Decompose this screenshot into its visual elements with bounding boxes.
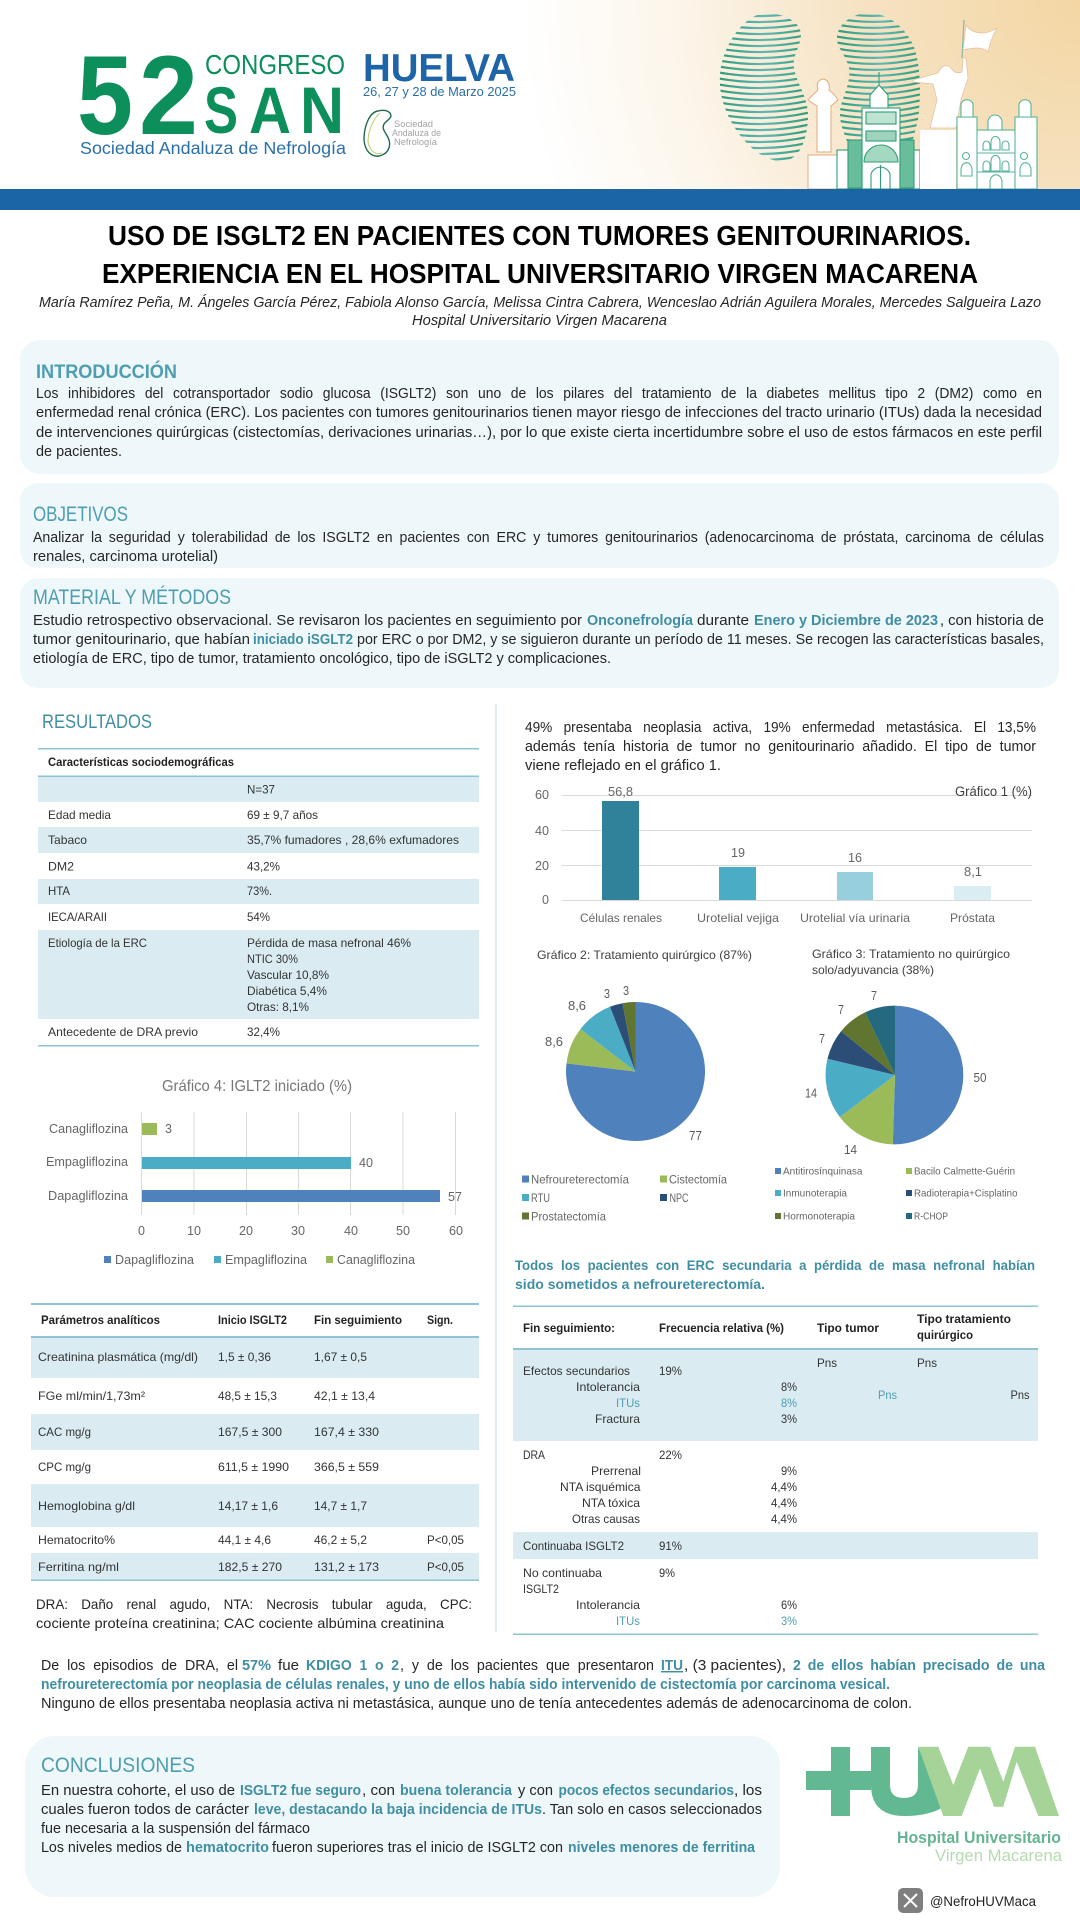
title [102,220,978,289]
chart: grafico 3 pie: 7 [819,1031,825,1046]
legend: Empagliflozina [225,1253,307,1267]
table: parametros analiticos: FGe ml/min/1,73m² [38,1389,145,1403]
table: caracteristicas sociodemograficas [38,748,479,1046]
panel: introduccion [20,340,1059,474]
table: caracteristicas sociodemograficas: DM2 [48,860,74,874]
text: metodos body: Estudio retrospectivo observacional. Se revisaron los pacientes en seguimiento por [33,613,582,629]
chart: grafico 4: 40 [344,1224,358,1238]
text: conclusiones body: hematocrito [186,1840,269,1856]
text: metodos body: , con historia de [940,613,1044,629]
table: caracteristicas sociodemograficas: NTIC 30% [247,952,298,966]
logo: hospital universitario: Hospital Universitario [897,1828,1061,1847]
text: DRA episodes paragraph: KDIGO 1 o 2 [306,1658,399,1674]
text: tumor description: viene reflejado en el gráfico 1. [525,758,721,774]
text: DRA episodes paragraph: De los episodios de DRA, el [41,1658,238,1674]
table: parametros analiticos: Inicio ISGLT2 [218,1313,287,1327]
table: parametros analiticos: Parámetros analíticos [41,1313,160,1327]
text: tumor description: además tenía historia de tumor no genitourinario añadido. El tipo de tumor [525,739,1036,755]
table: parametros analiticos: 48,5 ± 15,3 [218,1389,277,1403]
text: DRA episodes paragraph: ITU [661,1658,683,1674]
chart: grafico 1: 8,1 [964,865,982,879]
table: parametros analiticos: 44,1 ± 4,6 [218,1533,271,1547]
table: fin seguimiento: Pns [817,1356,837,1370]
text: metodos body: tumor genitourinario, que habían [33,632,250,648]
text: nefroureterectomia finding [515,1258,1035,1292]
congress logo [77,33,516,158]
table: fin seguimiento: DRA [523,1448,545,1462]
chart: grafico 2 pie: 3 [604,986,610,1001]
table: parametros analiticos: 182,5 ± 270 [218,1560,282,1574]
text: introduccion body [36,386,1042,460]
text: conclusiones body: En nuestra cohorte, el uso de [41,1783,235,1799]
chart: grafico 4: 10 [187,1224,201,1238]
icon: flag statue [913,20,997,189]
heading: resultados: RESULTADOS [42,712,152,733]
table: caracteristicas sociodemograficas: Edad media [48,808,111,822]
table: parametros analiticos: Ferritina ng/ml [38,1560,119,1574]
table: parametros analiticos: 366,5 ± 559 [314,1460,379,1474]
text: conclusiones body: niveles menores de ferritina [568,1840,756,1856]
table: fin seguimiento: 9% [659,1566,675,1580]
table: fin seguimiento: Frecuencia relativa (%) [659,1321,784,1335]
header banner [0,0,1080,210]
chart: grafico 4: 50 [396,1224,410,1238]
text: conclusiones body: y con [518,1783,553,1799]
chart: grafico 4: Dapagliflozina [48,1189,128,1203]
table: fin seguimiento: Pns [917,1356,937,1370]
text: DRA episodes paragraph: 2 de ellos habían precisado de una [793,1658,1046,1674]
text: tumor description [525,720,1036,774]
table: fin seguimiento: 4,4% [771,1480,797,1494]
table: fin seguimiento: 9% [781,1464,797,1478]
chart: grafico 1: 56,8 [608,785,633,799]
table: parametros analiticos: 167,5 ± 300 [218,1425,282,1439]
table: fin seguimiento: 8% [781,1396,797,1410]
table: parametros analiticos: 1,67 ± 0,5 [314,1350,367,1364]
chart: grafico 4: 0 [138,1224,145,1238]
table: fin seguimiento: NTA tóxica [582,1496,640,1510]
legend: RTU [531,1191,550,1205]
text: introduccion body: Los inhibidores del cotransportador sodio glucosa (ISGLT2) son uno de los pilares del tratamiento de la diabetes mellitus tipo 2 (DM2) como en [36,386,1042,402]
text: conclusiones body: pocos efectos secundarios [558,1783,734,1799]
text: conclusiones body [41,1783,762,1856]
table: fin seguimiento: Pns [878,1388,897,1402]
table: caracteristicas sociodemograficas: Etiología de la ERC [48,936,147,950]
text: introduccion body: enfermedad renal crónica (ERC). Los pacientes con tumores genitourinarios tienen mayor riesgo de infecciones del tracto urinario (ITUs) dada la necesidad [36,405,1042,421]
text: abbreviations footnote [36,1596,472,1631]
chart: grafico 1: 19 [731,846,745,860]
bars [602,801,991,900]
table: caracteristicas sociodemograficas: Características sociodemográficas [48,755,234,769]
heading: material y metodos: MATERIAL Y MÉTODOS [33,586,231,609]
table: caracteristicas sociodemograficas: Antecedente de DRA previo [48,1025,198,1039]
chart: grafico 1: 40 [535,824,549,838]
table: parametros analiticos: 611,5 ± 1990 [218,1460,289,1474]
text: metodos body: iniciado iSGLT2 [253,632,353,648]
table: fin seguimiento: Tipo tratamiento [917,1312,1011,1326]
heading: conclusiones: CONCLUSIONES [41,1754,195,1777]
table: fin seguimiento: 91% [659,1539,682,1553]
table: fin seguimiento: No continuaba [523,1566,602,1580]
table: caracteristicas sociodemograficas: 43,2% [247,860,280,874]
pie slices [566,1002,705,1141]
table: fin seguimiento: 6% [781,1598,797,1612]
table: parametros analiticos: P<0,05 [427,1560,464,1574]
table: fin seguimiento: quirúrgico [917,1328,973,1342]
congress logo: S [204,73,238,147]
congress logo: N [300,73,344,147]
chart: grafico 3 pie: 14 [805,1086,817,1100]
table: parametros analiticos: 14,7 ± 1,7 [314,1499,367,1513]
table: parametros analiticos: 131,2 ± 173 [314,1560,379,1574]
icon: cathedral [957,100,1037,189]
table: caracteristicas sociodemograficas: Tabaco [48,833,87,847]
panel: conclusiones [25,1736,780,1897]
table: fin seguimiento: Efectos secundarios [523,1364,630,1378]
legend: Canagliflozina [337,1253,415,1267]
icon: church [837,72,920,189]
chart: grafico 1: Urotelial vía urinaria [800,911,910,925]
table: caracteristicas sociodemograficas: Vascular 10,8% [247,968,329,982]
panel: material y metodos [20,578,1059,688]
table: caracteristicas sociodemograficas: 32,4% [247,1025,280,1039]
chart: grafico 2 pie [522,948,752,1224]
congress logo: A [249,73,291,147]
legend: Radioterapia+Cisplatino [914,1188,1018,1200]
chart: grafico 1 [535,784,1032,925]
text: conclusiones body: Los niveles medios de [41,1840,182,1856]
congress logo: HUELVA [363,47,515,90]
chart: grafico 1: 60 [535,788,549,802]
table: parametros analiticos: Hemoglobina g/dl [38,1499,135,1513]
table: fin seguimiento: 4,4% [771,1496,797,1510]
table: fin seguimiento: 19% [659,1364,682,1378]
legend [522,1172,727,1224]
table: fin seguimiento: 3% [781,1412,797,1426]
text: objetivos body: renales, carcinoma urotelial) [33,549,218,565]
text: DRA episodes paragraph [41,1658,1046,1712]
table: fin seguimiento: 22% [659,1448,682,1462]
table: parametros analiticos: CAC mg/g [38,1425,91,1439]
table: parametros analiticos [31,1303,479,1581]
pie slices [826,1006,963,1144]
table: parametros analiticos: 46,2 ± 5,2 [314,1533,367,1547]
table: parametros analiticos: Fin seguimiento [314,1313,402,1327]
table: fin seguimiento: Prerrenal [591,1464,641,1478]
legend: Cistectomía [669,1172,727,1186]
chart: grafico 4: 57 [448,1190,462,1204]
text: nefroureterectomia finding: sido sometidos a nefroureterectomía. [515,1277,765,1292]
congress logo: 5 [77,33,133,158]
text: DRA episodes paragraph: 57% [242,1658,271,1674]
authors [39,294,1041,329]
text: metodos body: Enero y Diciembre de 2023 [754,613,938,629]
text: metodos body [33,613,1044,667]
text: abbreviations footnote: cociente proteína creatinina; CAC cociente albúmina creatinina [36,1615,444,1631]
chart: grafico 4: 20 [239,1224,253,1238]
text: metodos body: durante [697,613,749,629]
text: DRA episodes paragraph: nefroureterectomía por neoplasia de células renales, y uno de ellos había sido intervenido de cistectomía por carcinoma vesical. [41,1677,890,1693]
text: DRA episodes paragraph: fue [278,1658,299,1674]
icon: small kidney [364,110,391,156]
congress logo: Sociedad [394,119,433,129]
table: caracteristicas sociodemograficas: N=37 [247,782,275,796]
table: fin seguimiento: ITUs [616,1396,640,1410]
chart: grafico 3 pie: 7 [871,988,877,1003]
legend [775,1166,1018,1222]
chart: grafico 3 pie: 50 [974,1070,986,1085]
table: parametros analiticos: P<0,05 [427,1533,464,1547]
table: fin seguimiento: Otras causas [572,1512,640,1526]
chart: grafico 1: Urotelial vejiga [697,911,779,925]
chart: grafico 3 pie: 14 [844,1142,857,1157]
table: fin seguimiento: 4,4% [771,1512,797,1526]
icon: kidney right [837,14,920,142]
table: fin seguimiento: Intolerancia [576,1598,640,1612]
table: parametros analiticos: 1,5 ± 0,36 [218,1350,271,1364]
chart: grafico 1: Próstata [950,911,995,925]
table: caracteristicas sociodemograficas: Otras: 8,1% [247,1000,309,1014]
table: caracteristicas sociodemograficas: 35,7% fumadores , 28,6% exfumadores [247,833,459,847]
text: objetivos body [33,530,1044,565]
chart: grafico 1: Células renales [580,911,662,925]
table: fin seguimiento: ISGLT2 [523,1582,559,1596]
table: fin seguimiento: 3% [781,1614,797,1628]
table: parametros analiticos: 167,4 ± 330 [314,1425,379,1439]
text: introduccion body: de pacientes. [36,444,122,460]
text: conclusiones body: fueron superiores tras el inicio de ISGLT2 con [272,1840,563,1856]
bars [142,1123,440,1202]
text: conclusiones body: fue necesaria a la suspensión del fármaco [41,1821,310,1837]
legend: Nefroureterectomía [531,1172,629,1186]
icon: X [898,1888,923,1913]
heading: objetivos: OBJETIVOS [33,503,128,526]
text: metodos body: etiología de ERC, tipo de tumor, tratamiento oncológico, tipo de iSGLT2 y complicaciones. [33,651,611,667]
heading: introduccion: INTRODUCCIÓN [36,361,177,383]
text: introduccion body: de intervenciones quirúrgicas (cistectomías, derivaciones urinarias…), por lo que existe cierta incertidumbre sobre el uso de estos fármacos en este perfil [36,425,1042,441]
congress logo: 26, 27 y 28 de Marzo 2025 [363,84,516,99]
text: DRA episodes paragraph: Ninguno de ellos presentaba neoplasia activa ni metastásica, aunque uno de tenía antecedentes además de adenocarcinoma de colon. [41,1696,912,1712]
table: fin seguimiento: 8% [781,1380,797,1394]
legend: Dapagliflozina [115,1253,194,1267]
chart: grafico 1: 20 [535,859,549,873]
chart title: Gráfico 1 (%) [955,784,1032,799]
chart: grafico 1: 0 [542,893,549,907]
chart: grafico 4: 3 [165,1122,172,1136]
table: caracteristicas sociodemograficas: 73%. [247,884,272,898]
table: fin seguimiento [513,1306,1038,1635]
congress logo: Nefrología [394,137,437,147]
table: caracteristicas sociodemograficas: HTA [48,884,70,898]
text: objetivos body: Analizar la seguridad y tolerabilidad de los ISGLT2 en pacientes con ERC y tumores genitourinarios (adenocarcinoma de próstata, carcinoma de células [33,530,1044,546]
authors: Hospital Universitario Virgen Macarena [412,313,667,329]
text: nefroureterectomia finding: Todos los pacientes con ERC secundaria a pérdida de masa nefronal habían [515,1258,1035,1273]
text: abbreviations footnote: DRA: Daño renal agudo, NTA: Necrosis tubular aguda, CPC: [36,1596,472,1612]
text: DRA episodes paragraph: , (3 pacientes), [684,1658,786,1674]
chart: grafico 2 pie: 8,6 [545,1034,563,1049]
title: USO DE ISGLT2 EN PACIENTES CON TUMORES GENITOURINARIOS. [108,220,971,251]
table: parametros analiticos: Sign. [427,1313,453,1327]
text: conclusiones body: leve, destacando la baja incidencia de ITUs [254,1802,542,1818]
table: fin seguimiento: Tipo tumor [817,1321,879,1335]
congress logo: 2 [139,33,198,158]
chart title: Gráfico 2: Tratamiento quirúrgico (87%) [537,948,752,962]
text: conclusiones body: . Tan solo en casos seleccionados [542,1802,762,1818]
authors: María Ramírez Peña, M. Ángeles García Pérez, Fabiola Alonso García, Melissa Cintra Cabrera, Wenceslao Adrián Aguilera Morales, Mercedes Salgueira Lazo [39,294,1041,311]
chart: grafico 4: 40 [359,1156,373,1170]
legend: Antitirosínquinasa [783,1166,863,1178]
legend: R-CHOP [914,1210,948,1222]
text: tumor description: 49% presentaba neoplasia activa, 19% enfermedad metastásica. El 13,5% [525,720,1036,736]
legend: NPC [670,1191,689,1205]
table: caracteristicas sociodemograficas: Pérdida de masa nefronal 46% [247,936,411,950]
chart: grafico 2 pie: 8,6 [568,998,586,1013]
text: conclusiones body: , con [362,1783,395,1799]
chart title: Gráfico 3: Tratamiento no quirúrgico [812,947,1010,961]
chart: grafico 4: 60 [449,1224,463,1238]
table: caracteristicas sociodemograficas: 69 ± 9,7 años [247,808,318,822]
table: parametros analiticos: Creatinina plasmática (mg/dl) [38,1350,198,1364]
table: fin seguimiento: Continuaba ISGLT2 [523,1539,624,1553]
chart: grafico 3 pie [775,947,1018,1222]
table: caracteristicas sociodemograficas: 54% [247,910,270,924]
social handle: @NefroHUVMaca [930,1894,1036,1909]
chart: grafico 4: Canagliflozina [49,1122,128,1136]
table: fin seguimiento: Pns [1010,1388,1030,1402]
icon: kidney left [720,14,808,160]
table: parametros analiticos: CPC mg/g [38,1460,91,1474]
text: conclusiones body: , los [734,1783,762,1799]
table: fin seguimiento: ITUs [616,1614,640,1628]
chart: grafico 3 pie: 7 [838,1002,844,1017]
logo: hospital universitario: Virgen Macarena [935,1846,1063,1865]
text: metodos body: por ERC o por DM2, y se siguieron durante un período de 11 meses. Se recogen las características basales, [357,632,1044,648]
table: caracteristicas sociodemograficas: IECA/ARAII [48,910,107,924]
chart: grafico 2 pie: 77 [689,1128,702,1143]
blue bar [0,189,1080,210]
chart: grafico 1: 16 [848,851,862,865]
text: conclusiones body: buena tolerancia [400,1783,513,1799]
chart: grafico 4: 30 [291,1224,305,1238]
title: EXPERIENCIA EN EL HOSPITAL UNIVERSITARIO VIRGEN MACARENA [102,258,978,289]
panel: objetivos [20,483,1059,568]
chart: grafico 2 pie: 3 [623,983,629,998]
legend: Bacilo Calmette-Guérin [914,1166,1015,1178]
table: fin seguimiento: NTA isquémica [560,1480,641,1494]
text: metodos body: Onconefrología [587,613,694,629]
legend: Inmunoterapia [783,1188,847,1200]
table: fin seguimiento: Fractura [595,1412,640,1426]
table: parametros analiticos: 42,1 ± 13,4 [314,1389,375,1403]
table: parametros analiticos: Hematocrito% [38,1533,115,1547]
chart: grafico 4 [46,1078,463,1267]
social handle [898,1888,1036,1913]
congress logo: CONGRESO [205,49,345,80]
table: fin seguimiento: Intolerancia [576,1380,640,1394]
icon: statue with plinth [808,79,838,189]
text: conclusiones body: cuales fueron todos de carácter [41,1802,249,1818]
chart title: solo/adyuvancia (38%) [812,963,934,977]
text: DRA episodes paragraph: , y de los pacientes que presentaron [400,1658,654,1674]
table: caracteristicas sociodemograficas: Diabética 5,4% [247,984,327,998]
logo: hospital universitario [806,1747,1063,1865]
congress logo: Sociedad Andaluza de Nefrología [80,138,346,158]
congress logo: Andaluza de [392,128,441,138]
chart title [812,947,1010,977]
table: parametros analiticos: 14,17 ± 1,6 [218,1499,278,1513]
legend: Hormonoterapia [783,1210,855,1222]
chart: grafico 4: Empagliflozina [46,1155,128,1169]
text: conclusiones body: ISGLT2 fue seguro [240,1783,361,1799]
legend [104,1253,415,1267]
table: fin seguimiento: Fin seguimiento: [523,1321,615,1335]
legend: Prostatectomía [531,1210,606,1224]
chart title: Gráfico 4: IGLT2 iniciado (%) [162,1078,352,1095]
